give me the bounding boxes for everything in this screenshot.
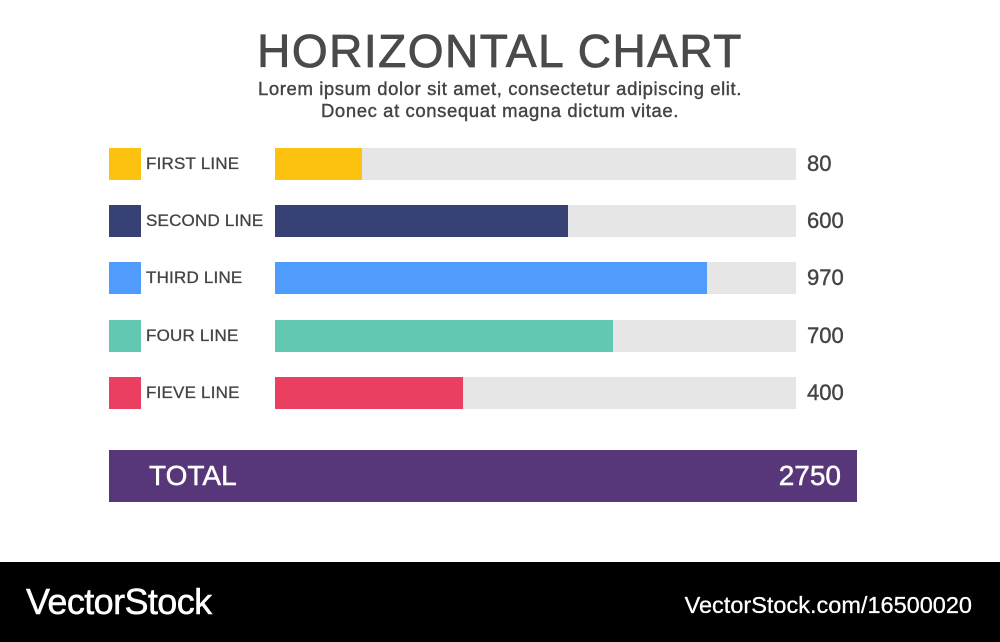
title: HORIZONTAL CHART [257,25,743,77]
total bar: 2750 [779,460,841,491]
row: third line: THIRD LINE [146,268,242,287]
total bar [109,450,857,502]
total bar: TOTAL [149,460,237,491]
row: fieve line: FIEVE LINE [146,383,240,402]
row: four line: 700 [807,323,844,348]
row: third line [109,262,844,294]
row: third line: 970 [807,265,844,290]
row: first line [109,148,831,180]
row: four line: FOUR LINE [146,326,238,345]
row: first line: 80 [807,151,831,176]
footer: VectorStock.com/16500020 [685,592,972,618]
row: second line: 600 [807,208,844,233]
row: fieve line: 400 [807,380,844,405]
subtitle: Lorem ipsum dolor sit amet, consectetur adipiscing elit. [258,78,742,99]
footer [0,562,1000,642]
subtitle: Donec at consequat magna dictum vitae. [321,100,679,121]
row: first line: FIRST LINE [146,154,239,173]
row: fieve line [109,377,844,409]
row: second line: SECOND LINE [146,211,263,230]
subtitle [258,78,742,122]
row: second line [109,205,844,237]
footer: VectorStock [26,581,212,622]
row: four line [109,320,844,352]
